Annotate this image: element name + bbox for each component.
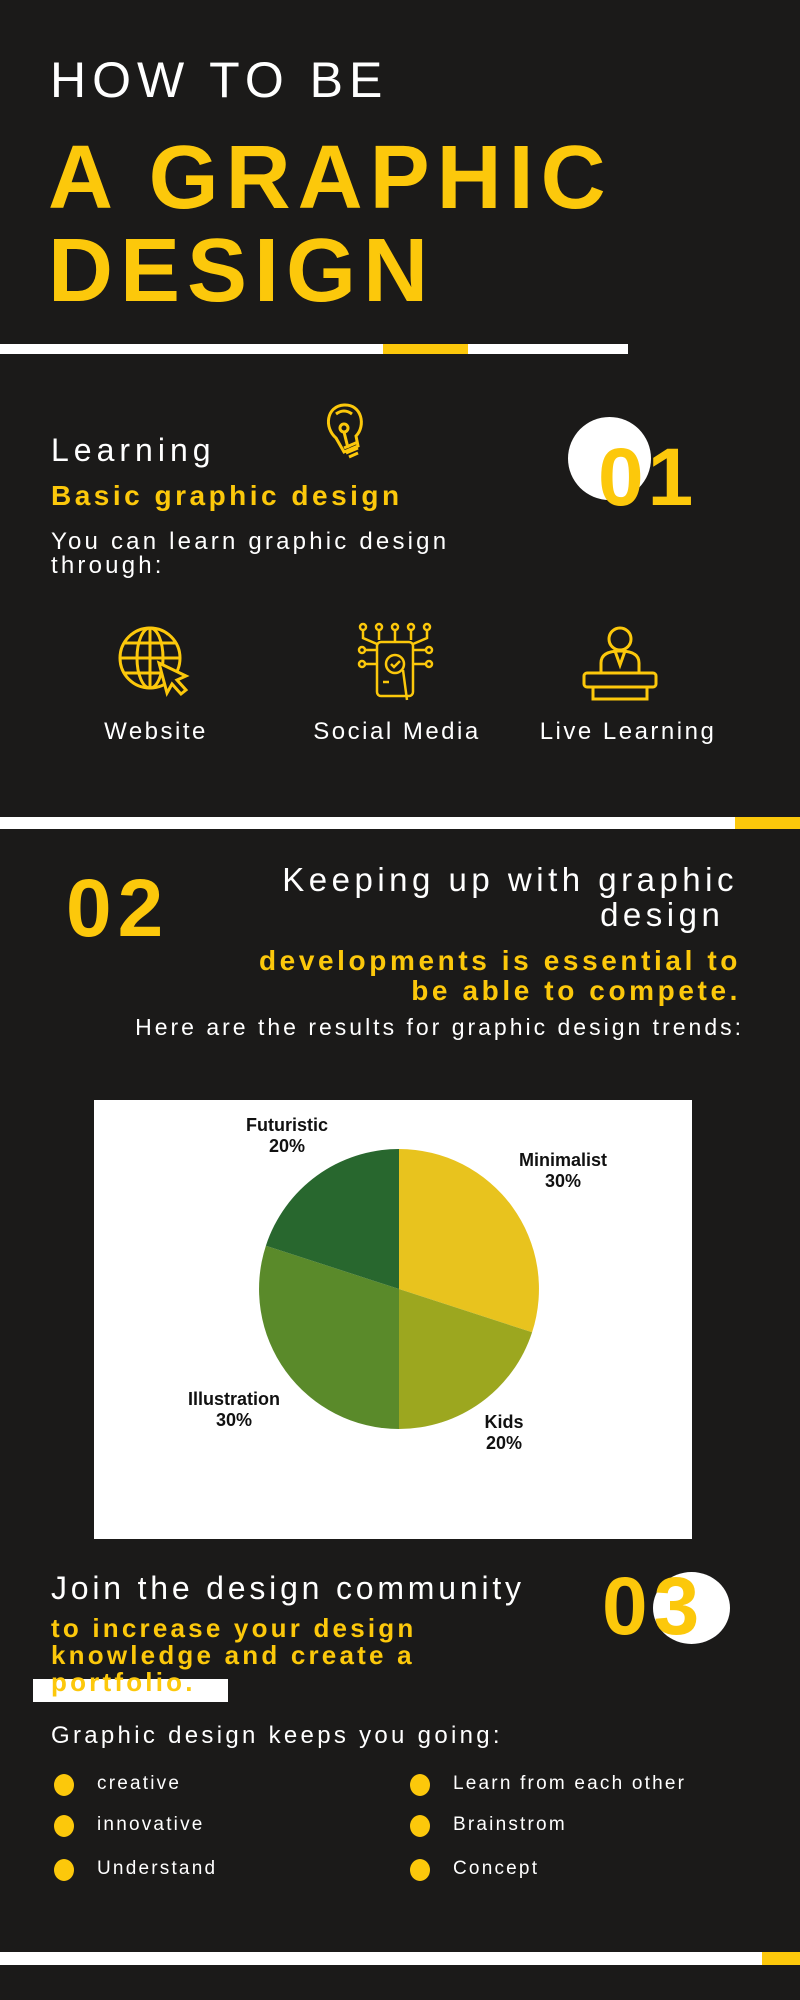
subheading: increase knowledge: portfolio. <box>51 1667 196 1697</box>
title: how to be: HOW TO BE <box>50 52 388 108</box>
label: live learning: Live Learning <box>540 718 716 745</box>
section 01 heading: Learning: Learning <box>51 432 216 468</box>
list: bullets: creative <box>97 1773 181 1794</box>
subheading: increase knowledge: to increase your design <box>51 1613 416 1643</box>
heading: join community: Join the design community <box>51 1570 525 1606</box>
label: kids: Kids <box>484 1412 524 1432</box>
number 01 with circle: 01 <box>598 432 697 523</box>
list: bullets: Understand <box>97 1858 217 1879</box>
title: a graphic design: DESIGN <box>48 221 435 321</box>
label: minimalist: 30% <box>545 1171 581 1191</box>
list: bullets: Learn from each other <box>453 1773 686 1794</box>
subheading: developments: developments is essential to <box>259 945 741 976</box>
slice: kids <box>399 1289 532 1429</box>
icon: social media <box>358 622 434 700</box>
list: bullets: Concept <box>453 1858 539 1879</box>
text: you can learn <box>51 528 449 579</box>
subheading: increase knowledge: knowledge and create a <box>51 1640 415 1670</box>
icon: website globe <box>118 626 190 697</box>
label: illustration: 30% <box>216 1410 252 1430</box>
label: illustration: Illustration <box>188 1389 280 1409</box>
slice: illustration <box>259 1246 399 1429</box>
text: keeps you going: Graphic design keeps you going: <box>51 1722 503 1749</box>
number 01 with circle <box>568 417 697 523</box>
slice: futuristic <box>266 1149 399 1289</box>
text: you can learn: through: <box>51 552 165 579</box>
text: results: Here are the results for graphic design trends: <box>135 1014 744 1040</box>
chart: pie <box>94 1100 692 1539</box>
label: minimalist: Minimalist <box>519 1150 607 1170</box>
heading: keeping up: design <box>600 896 724 933</box>
divider bar bottom <box>0 1952 800 1965</box>
icon: light bulb <box>326 404 363 458</box>
subheading: developments <box>259 945 741 1006</box>
heading: keeping up: Keeping up with graphic <box>282 861 738 898</box>
number 03 with circle: 03 <box>602 1561 705 1652</box>
title: a graphic design <box>48 128 613 321</box>
slice: minimalist <box>399 1149 539 1332</box>
divider bar middle <box>0 817 800 829</box>
white rect behind portfolio <box>33 1679 228 1702</box>
heading: keeping up <box>282 861 738 933</box>
label: futuristic: Futuristic <box>246 1115 328 1135</box>
label: social media: Social Media <box>313 718 481 745</box>
list: bullets <box>54 1773 686 1881</box>
title: a graphic design: A GRAPHIC <box>48 128 613 228</box>
label: futuristic: 20% <box>269 1136 305 1156</box>
label: website: Website <box>104 718 208 745</box>
number 02: 02 <box>66 863 169 954</box>
subheading: developments: be able to compete. <box>411 975 741 1006</box>
icon: live learning <box>582 626 658 700</box>
list: bullets: Brainstrom <box>453 1814 567 1835</box>
label: kids: 20% <box>486 1433 522 1453</box>
list: bullets: innovative <box>97 1814 205 1835</box>
subheading: basic graphic design: Basic graphic design <box>51 480 403 511</box>
text: you can learn: You can learn graphic design <box>51 528 449 555</box>
subheading: increase knowledge <box>51 1613 416 1697</box>
divider bar top <box>0 344 628 354</box>
